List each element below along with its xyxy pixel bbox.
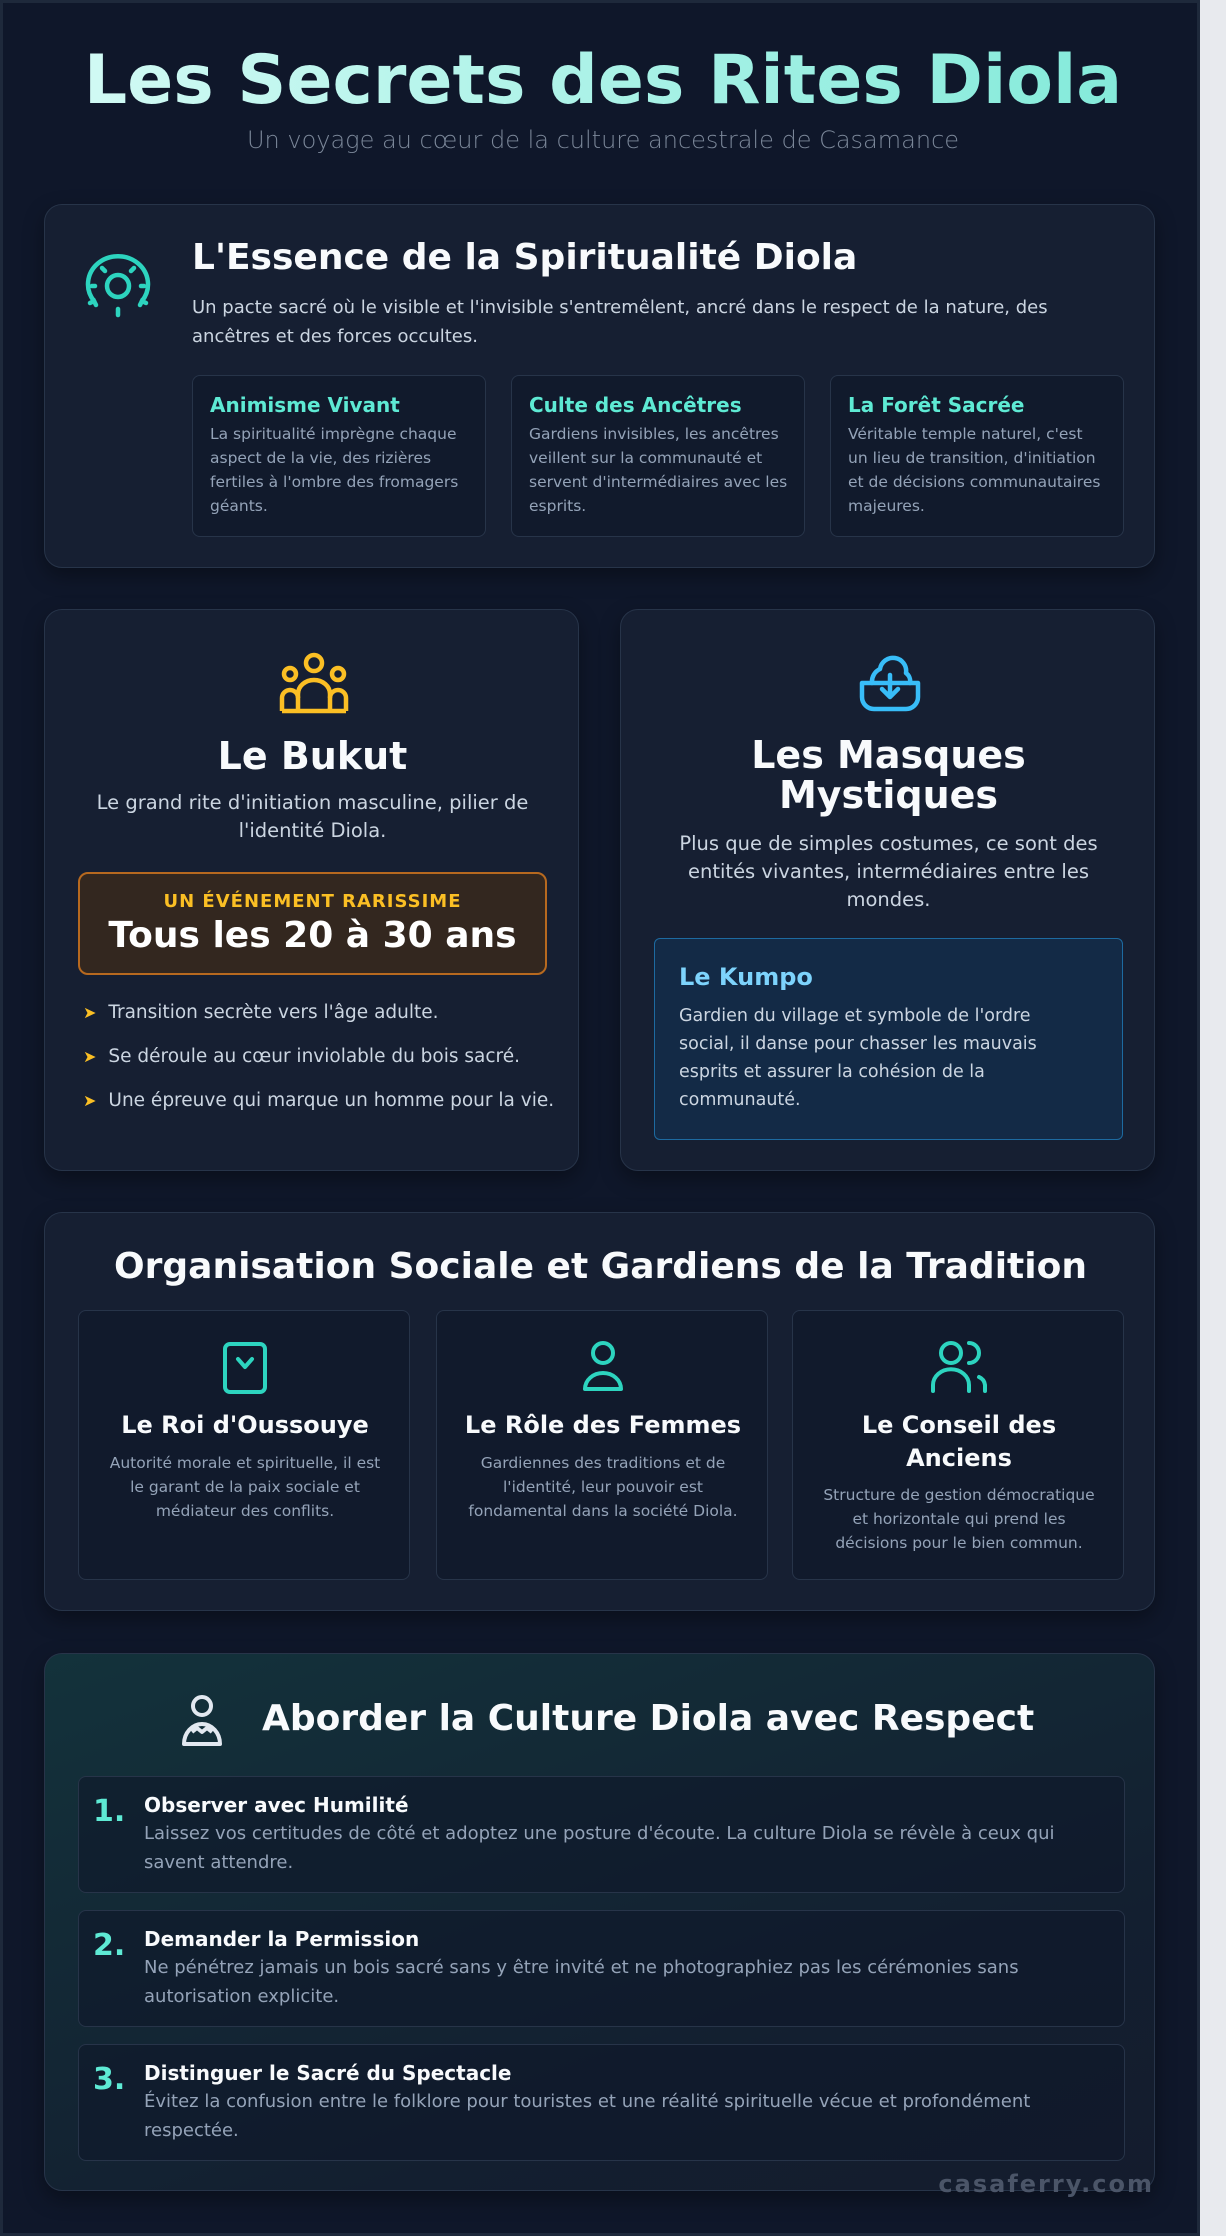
card: conseil [792, 1310, 1124, 1580]
callout: kumpo: Gardien du village et symbole de l'ordre social, il danse pour chasser les mauvais esprits et assurer la cohésion de la communauté. [679, 1006, 1037, 1110]
heading: Les Masques [751, 733, 1026, 777]
step 1: Laissez vos certitudes de côté et adoptez une posture d'écoute. La culture Diola se révèle à ceux qui savent attendre. [144, 1823, 1054, 1873]
heading with icon: Aborder la Culture Diola avec Respect [262, 1698, 1034, 1739]
intro text: Un pacte sacré où le visible et l'invisible s'entremêlent, ancré dans le respect de la nature, des ancêtres et des forces occultes. [192, 297, 1048, 347]
heading [751, 733, 1026, 817]
panel: masques [620, 609, 1155, 1171]
card: roi: Autorité morale et spirituelle, il est le garant de la paix sociale et médiateur des conflits. [110, 1454, 380, 1520]
description: Plus que de simples costumes, ce sont des entités vivantes, intermédiaires entre les mondes. [679, 832, 1098, 911]
card: femmes [436, 1310, 768, 1580]
description: Le grand rite d'initiation masculine, pilier de l'identité Diola. [97, 791, 528, 842]
heading: Organisation Sociale et Gardiens de la Tradition [114, 1246, 1087, 1287]
title: Les Secrets des Rites Diola [84, 41, 1122, 120]
callout: rare event: Tous les 20 à 30 ans [108, 915, 517, 956]
card: femmes: Gardiennes des traditions et de l'identité, leur pouvoir est fondamental dans la société Diola. [468, 1454, 738, 1520]
callout: rare event [78, 872, 547, 975]
card: animisme [192, 375, 486, 537]
step 1 [78, 1776, 1125, 1893]
step 3 [78, 2044, 1125, 2161]
card: animisme: La spiritualité imprègne chaque aspect de la vie, des rizières fertiles à l'ombre des fromagers géants. [210, 425, 458, 515]
card: roi [78, 1310, 410, 1580]
step 2 [78, 1910, 1125, 2027]
icon: person [583, 1341, 623, 1391]
list: bukut facts: ➤ Une épreuve qui marque un homme pour la vie. [83, 1090, 554, 1111]
step 3: Évitez la confusion entre le folklore pour touristes et une réalité spirituelle vécue et profondément respectée. [144, 2091, 1030, 2141]
card: animisme: Animisme Vivant [210, 393, 400, 417]
list: bukut facts: ➤ Se déroule au cœur inviolable du bois sacré. [83, 1046, 520, 1067]
step 2: Ne pénétrez jamais un bois sacré sans y être invité et ne photographiez pas les cérémonies sans autorisation explicite. [144, 1957, 1019, 2007]
panel: essence [44, 204, 1155, 568]
card: femmes: Le Rôle des Femmes [465, 1411, 741, 1439]
icon: spirit [86, 254, 150, 318]
card: conseil: Structure de gestion démocratique et horizontale qui prend les décisions pour le bien commun. [823, 1486, 1095, 1552]
heading: L'Essence de la Spiritualité Diola [192, 237, 857, 278]
watermark: casaferry.com [938, 2170, 1154, 2198]
card: ancetres: Culte des Ancêtres [529, 393, 742, 417]
card: ancetres [511, 375, 805, 537]
icon: cloud [860, 656, 920, 712]
card: foret: La Forêt Sacrée [848, 393, 1024, 417]
step 1: 1. [93, 1794, 125, 1829]
panel: organisation sociale [44, 1212, 1155, 1611]
card: conseil: Le Conseil des Anciens [862, 1411, 1056, 1472]
panel: bukut [44, 609, 579, 1171]
icon: person respect [182, 1695, 222, 1746]
panel: respect [44, 1653, 1155, 2191]
list: bukut facts [83, 1002, 554, 1111]
step 3: Distinguer le Sacré du Spectacle [144, 2061, 511, 2085]
card: ancetres: Gardiens invisibles, les ancêtres veillent sur la communauté et servent d'intermédiaires avec les esprits. [529, 425, 787, 515]
step 2: Demander la Permission [144, 1927, 419, 1951]
heading: Le Bukut [218, 734, 407, 778]
icon: users [931, 1341, 987, 1393]
icon: phone [223, 1342, 267, 1394]
step 3: 3. [93, 2062, 125, 2097]
card: foret: un lieu de transition, d'initiation et de décisions communautaires majeures. [848, 449, 1100, 515]
callout: rare event: UN ÉVÉNEMENT RARISSIME [163, 891, 462, 912]
icon: group [280, 652, 348, 714]
step 2: 2. [93, 1928, 125, 1963]
list: bukut facts: ➤ Transition secrète vers l'âge adulte. [83, 1002, 439, 1023]
card: foret: Véritable temple naturel, c'est [848, 425, 1083, 443]
step 1: Observer avec Humilité [144, 1793, 409, 1817]
callout: kumpo: Le Kumpo [679, 963, 813, 991]
heading: Mystiques [779, 773, 998, 817]
card: foret [830, 375, 1124, 537]
callout: kumpo [654, 938, 1123, 1140]
card: roi: Le Roi d'Oussouye [121, 1411, 369, 1439]
subtitle: Un voyage au cœur de la culture ancestrale de Casamance [247, 126, 959, 154]
